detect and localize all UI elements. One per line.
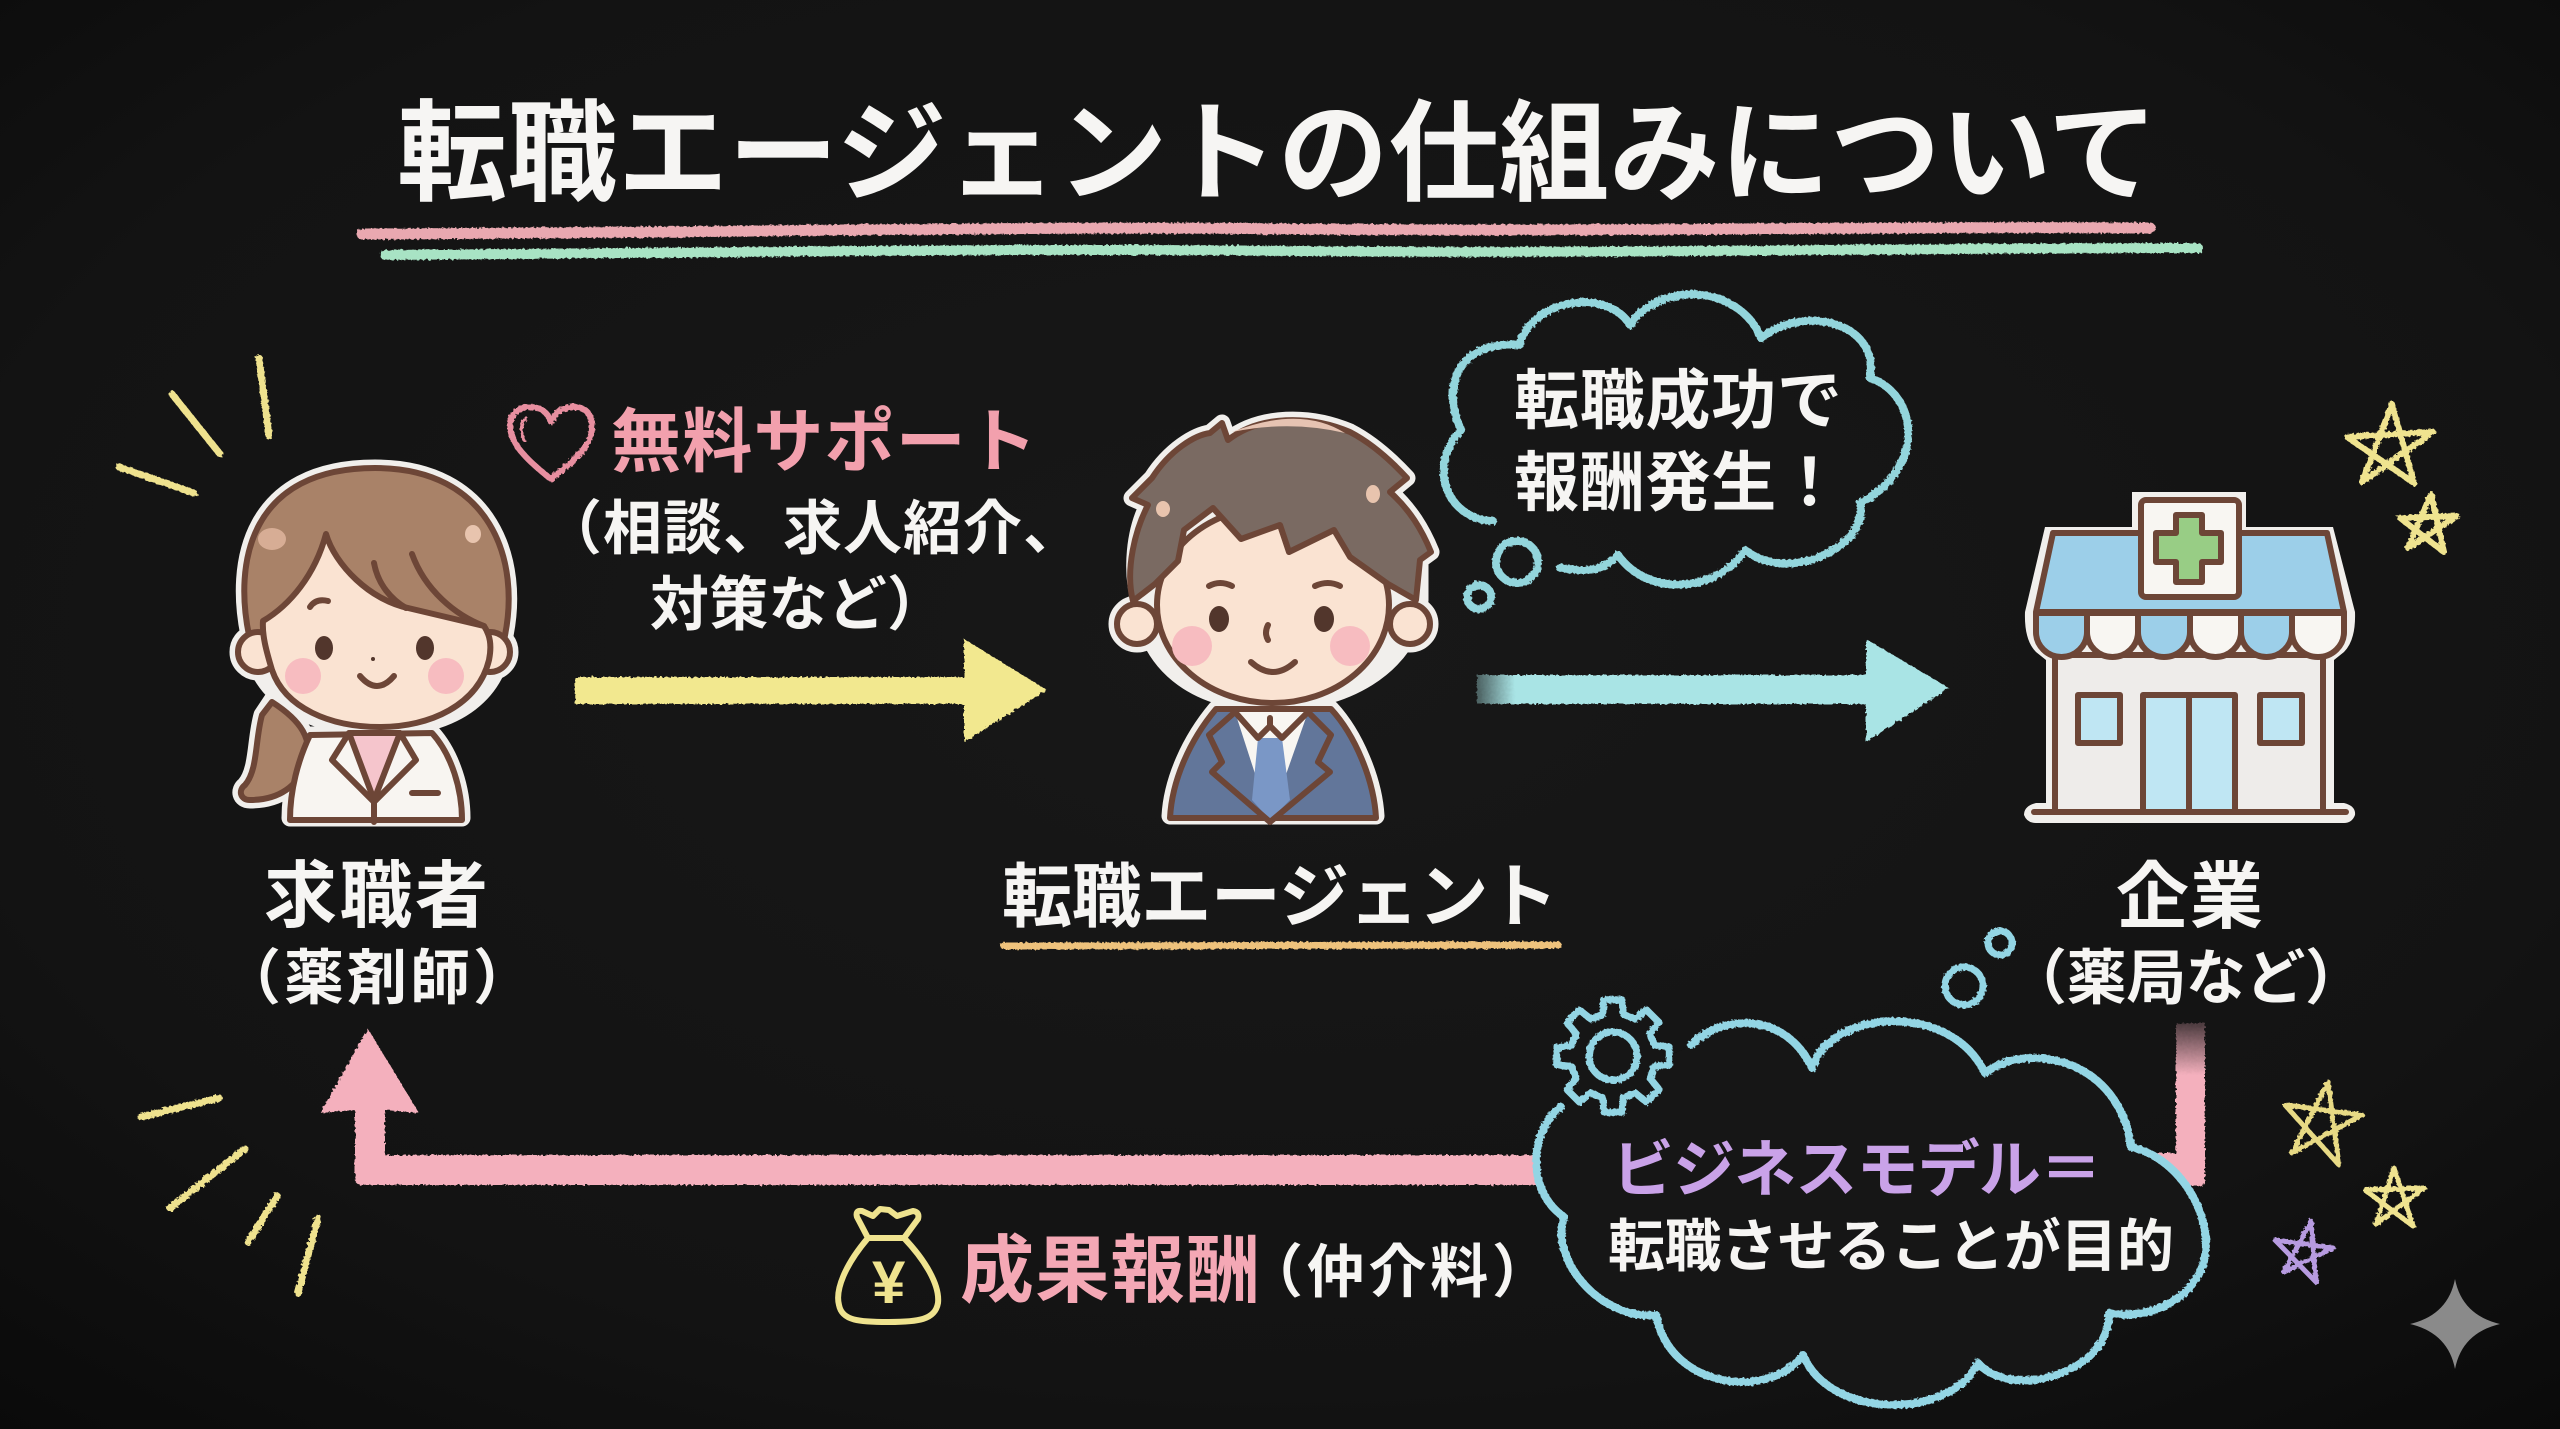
title underlines: [362, 228, 2198, 255]
thought cloud: success fee: [1444, 294, 1908, 609]
icon: heart: [510, 407, 592, 479]
character: recruiting agent: [1117, 419, 1431, 822]
stars: bottom right: [2275, 1082, 2424, 1282]
label: job seeker: [221, 856, 533, 1012]
thought cloud: success fee: 転職成功で: [1514, 364, 1842, 437]
icon: gear: [1557, 1000, 1669, 1112]
rays: top left: [119, 358, 269, 493]
thought cloud: success fee: 報酬発生！: [1514, 446, 1842, 519]
label: free support: （相談、求人紹介、: [543, 496, 1082, 562]
sparkle watermark: [2410, 1279, 2500, 1369]
label: success fee: 成果報酬: [960, 1229, 1260, 1312]
icon: money bag: ¥: [872, 1249, 906, 1316]
label: free support: [543, 403, 1082, 638]
arrow: teal to company: [1477, 639, 1949, 742]
label: company: （薬局など）: [2007, 945, 2365, 1012]
label: success fee: [960, 1229, 1550, 1312]
cloud callout: business model: 転職させることが目的: [1608, 1215, 2174, 1279]
small thought bubbles near company: [1945, 931, 2012, 1005]
label: free support: 対策など）: [650, 572, 946, 638]
stars: top right: [2347, 404, 2457, 552]
title: 転職エージェントの仕組みについて: [397, 93, 2158, 216]
label: success fee: （仲介料）: [1245, 1240, 1550, 1305]
rays: bottom left: [141, 1098, 318, 1293]
label: job seeker: 求職者: [264, 856, 488, 937]
arrow: yellow to agent: [575, 639, 1047, 742]
icon: pharmacy building: [2024, 492, 2355, 823]
arrow: pink fee flow back to job seeker: [320, 1023, 2205, 1186]
character: job seeker pharmacist: [238, 468, 510, 822]
cloud callout: business model: [1536, 1021, 2206, 1405]
icon: money bag: [838, 1209, 938, 1322]
cloud callout: business model: ビジネスモデル＝: [1612, 1136, 2102, 1205]
label: company: 企業: [2116, 857, 2263, 938]
label: job seeker: （薬剤師）: [221, 945, 533, 1012]
label: recruiting agent: 転職エージェント: [1002, 858, 1558, 936]
label: free support: 無料サポート: [611, 403, 1037, 481]
label: company: [2007, 857, 2365, 1012]
